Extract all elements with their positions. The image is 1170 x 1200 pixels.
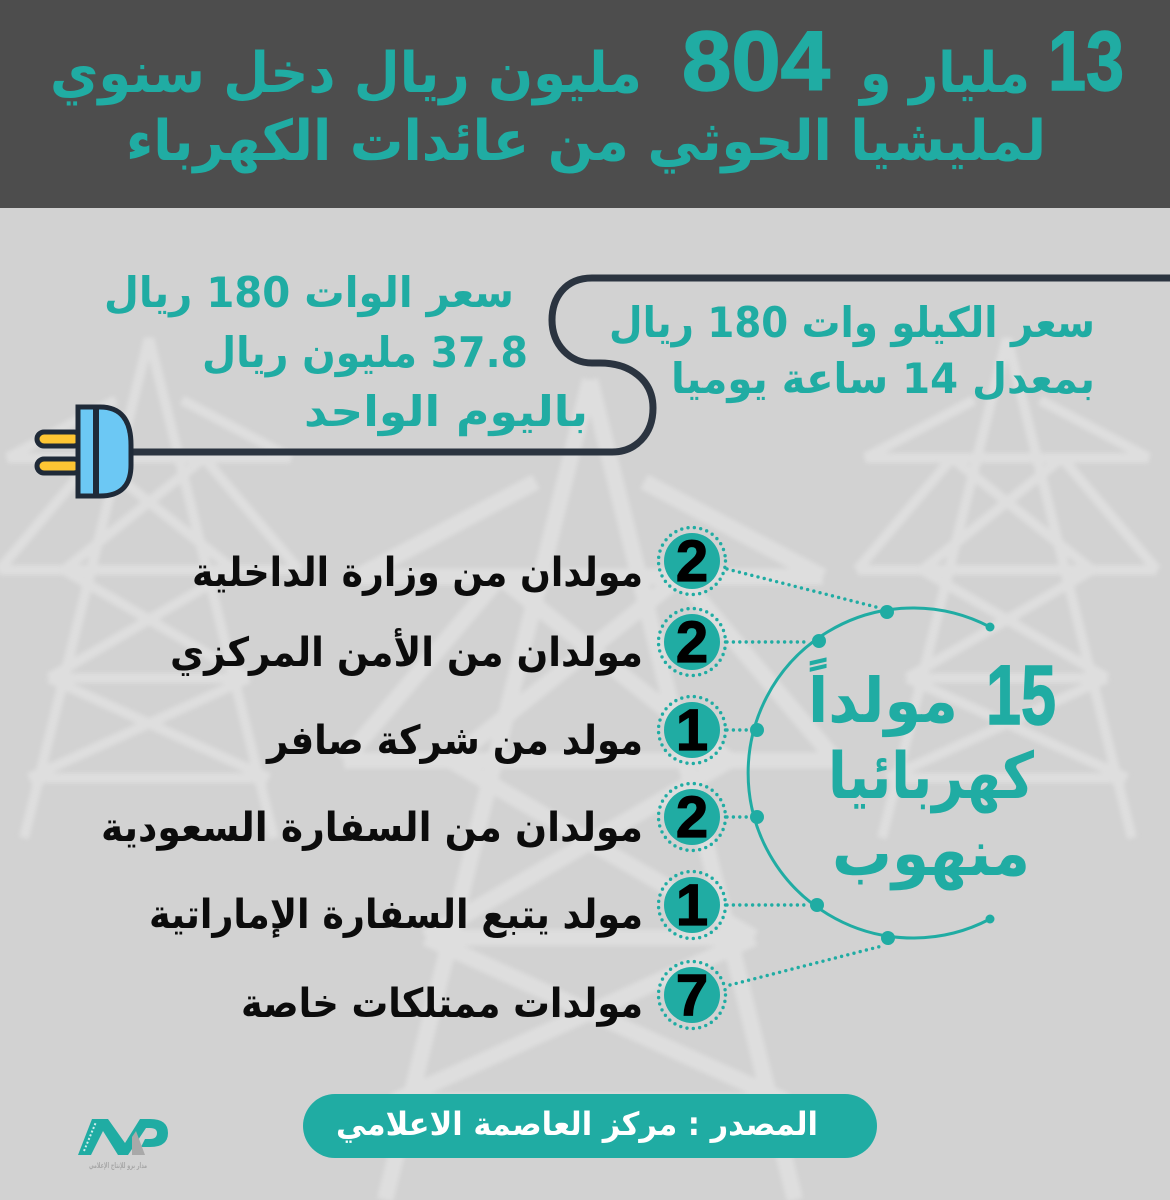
item 4: مولدان من السفارة السعودية [101, 805, 643, 851]
generator arc [727, 569, 994, 985]
item 2 [170, 608, 726, 676]
item 6: مولدات ممتلكات خاصة [241, 981, 643, 1027]
callout: 15 looted generators [808, 648, 1056, 891]
item 5: 1 [676, 873, 708, 938]
item 1: مولدان من وزارة الداخلية [192, 550, 643, 596]
item 4: 2 [676, 785, 708, 850]
logo: مدار برو للإنتاج الإعلامي [89, 1161, 147, 1170]
item 5 [149, 872, 726, 938]
item 1: 2 [676, 529, 708, 594]
text: watt price [104, 268, 588, 437]
title line 1: مليار و [857, 41, 1030, 106]
power cable [130, 278, 1170, 452]
background towers [0, 338, 1157, 1200]
callout: 15 looted generators: 15 [986, 648, 1056, 742]
item 5: مولد يتبع السفارة الإماراتية [149, 892, 643, 938]
text: kilowatt price: بمعدل 14 ساعة يوميا [671, 354, 1095, 404]
item 1 [192, 528, 726, 596]
item 2: مولدان من الأمن المركزي [170, 627, 643, 676]
title line 2: لمليشيا الحوثي من عائدات الكهرباء [126, 109, 1046, 174]
item 2: 2 [676, 610, 708, 675]
callout: 15 looted generators: مولداً [808, 656, 958, 737]
callout: 15 looted generators: منهوب [832, 817, 1030, 891]
item 6: 7 [676, 963, 708, 1028]
icon: plug [37, 407, 131, 496]
title line 1: 13 [1048, 14, 1124, 108]
source pill [303, 1094, 877, 1158]
item 3 [265, 696, 726, 764]
text: watt price: 37.8 مليون ريال [202, 328, 528, 378]
item 3: 1 [676, 698, 708, 763]
item 4 [101, 784, 726, 851]
item 6 [241, 962, 726, 1028]
item 3: مولد من شركة صافر [265, 718, 643, 764]
header band [0, 0, 1170, 208]
source pill: المصدر : مركز العاصمة الاعلامي [336, 1105, 818, 1143]
title line 1: 804 [682, 14, 830, 108]
text: watt price: سعر الوات 180 ريال [104, 268, 514, 318]
title line 1: مليون ريال دخل سنوي [50, 41, 642, 106]
logo [78, 1119, 168, 1170]
callout: 15 looted generators: كهربائيا [828, 740, 1035, 814]
text: kilowatt price: سعر الكيلو وات 180 ريال [609, 298, 1095, 348]
text: kilowatt price [609, 298, 1095, 404]
title line 1 [50, 14, 1124, 108]
text: watt price: باليوم الواحد [304, 387, 588, 437]
